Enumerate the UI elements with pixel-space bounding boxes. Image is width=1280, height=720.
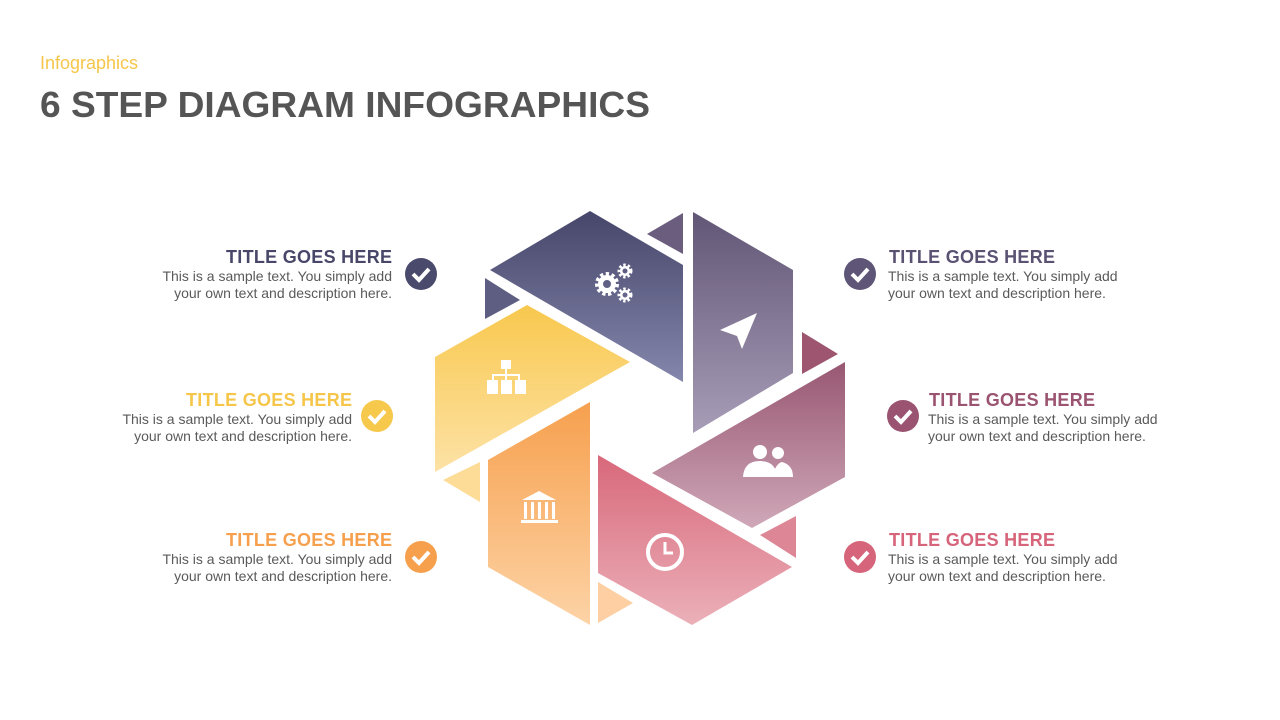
icon: check bbox=[844, 258, 876, 290]
callout: left middle (yellow): TITLE GOES HERE bbox=[186, 390, 352, 410]
icon: bank bbox=[521, 491, 558, 523]
callout: left middle (yellow): This is a sample text. You simply add bbox=[122, 411, 352, 427]
segment: hierarchy (yellow) bbox=[435, 305, 630, 502]
callout: right bottom (pink) bbox=[844, 530, 1118, 584]
callout: left middle (yellow) bbox=[122, 390, 393, 444]
segment: paper plane (purple) bbox=[647, 212, 793, 433]
callout: right bottom (pink): your own text and description here. bbox=[888, 568, 1106, 584]
callout: left top (navy): This is a sample text. You simply add bbox=[162, 268, 392, 284]
icon: hierarchy bbox=[487, 360, 526, 394]
callout: right middle (mauve): This is a sample text. You simply add bbox=[928, 411, 1158, 427]
icon: check bbox=[844, 541, 876, 573]
icon: gears bbox=[597, 265, 631, 301]
icon: check bbox=[887, 400, 919, 432]
callout: left bottom (orange) bbox=[162, 530, 437, 584]
subtitle: Infographics bbox=[40, 53, 138, 73]
callout: left bottom (orange): your own text and description here. bbox=[174, 568, 392, 584]
callout: right bottom (pink): TITLE GOES HERE bbox=[889, 530, 1055, 550]
callout: left top (navy): TITLE GOES HERE bbox=[226, 247, 392, 267]
callout: right top (purple): This is a sample text. You simply add bbox=[888, 268, 1118, 284]
title: 6 STEP DIAGRAM INFOGRAPHICS bbox=[40, 84, 650, 125]
callout: left top (navy) bbox=[162, 247, 437, 301]
callout: left top (navy): your own text and description here. bbox=[174, 285, 392, 301]
segment: clock (pink) bbox=[598, 455, 796, 625]
icon: clock bbox=[648, 535, 682, 569]
callout: right top (purple): your own text and description here. bbox=[888, 285, 1106, 301]
segment: gears (navy) bbox=[485, 211, 683, 382]
callout: right top (purple) bbox=[844, 247, 1118, 301]
segment: bank (orange) bbox=[488, 402, 633, 625]
icon: check bbox=[361, 400, 393, 432]
callout: right middle (mauve): TITLE GOES HERE bbox=[929, 390, 1095, 410]
callout: right middle (mauve) bbox=[887, 390, 1158, 444]
callout: right top (purple): TITLE GOES HERE bbox=[889, 247, 1055, 267]
segment: people (mauve) bbox=[652, 332, 845, 528]
hexagon diagram bbox=[435, 211, 845, 625]
callout: left bottom (orange): TITLE GOES HERE bbox=[226, 530, 392, 550]
icon: check bbox=[405, 541, 437, 573]
callout: right middle (mauve): your own text and description here. bbox=[928, 428, 1146, 444]
callout: left middle (yellow): your own text and description here. bbox=[134, 428, 352, 444]
icon: paper plane bbox=[720, 313, 757, 349]
icon: check bbox=[405, 258, 437, 290]
callout: right bottom (pink): This is a sample text. You simply add bbox=[888, 551, 1118, 567]
callout: left bottom (orange): This is a sample text. You simply add bbox=[162, 551, 392, 567]
icon: people bbox=[743, 445, 793, 477]
